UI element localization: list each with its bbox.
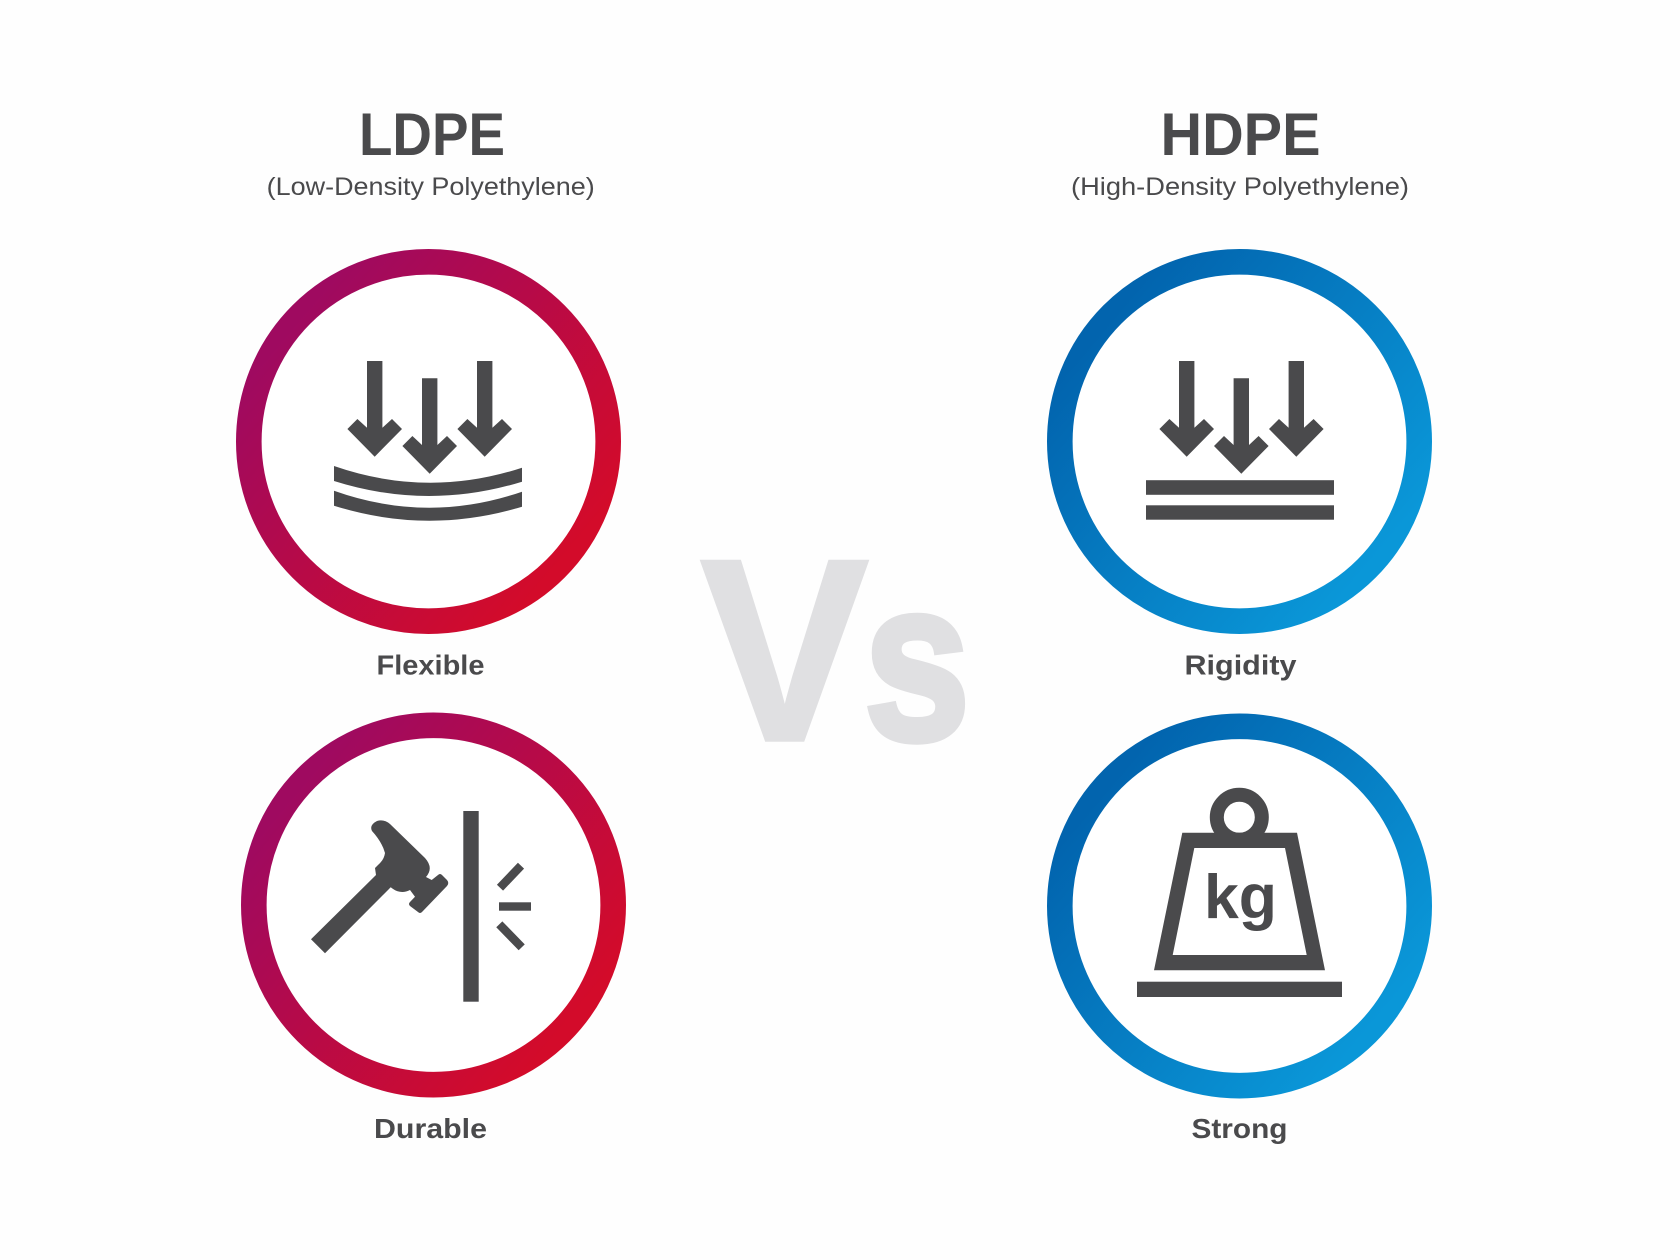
gradient ring: flexible xyxy=(249,262,608,621)
gradient ring: strong xyxy=(1060,726,1419,1086)
icon: kg weight on base xyxy=(1137,795,1342,997)
icon: kg weight on base: kg xyxy=(1204,863,1277,932)
Vs watermark: s xyxy=(864,534,970,788)
label: Flexible: Flexible xyxy=(376,650,484,680)
gradient ring: rigidity xyxy=(1060,262,1419,621)
gradient ring: durable xyxy=(254,725,613,1085)
subheading: High-Density Polyethylene: (High-Density Polyethylene) xyxy=(1071,173,1409,201)
panel: LDPE column xyxy=(249,101,613,1144)
icon: hammer striking wall xyxy=(311,811,531,1002)
icon: arrows pressing on curved sheets xyxy=(334,361,522,521)
Vs watermark xyxy=(700,506,970,796)
panel: HDPE column xyxy=(1060,101,1419,1144)
subheading: Low-Density Polyethylene: (Low-Density Polyethylene) xyxy=(267,173,595,201)
label: Durable: Durable xyxy=(374,1113,487,1144)
label: Strong: Strong xyxy=(1192,1113,1288,1144)
icon: arrows pressing on flat sheets xyxy=(1146,361,1334,520)
Vs watermark: V xyxy=(700,506,870,796)
heading: LDPE: LDPE xyxy=(359,101,505,168)
label: Rigidity: Rigidity xyxy=(1184,650,1297,680)
heading: HDPE: HDPE xyxy=(1160,101,1320,168)
